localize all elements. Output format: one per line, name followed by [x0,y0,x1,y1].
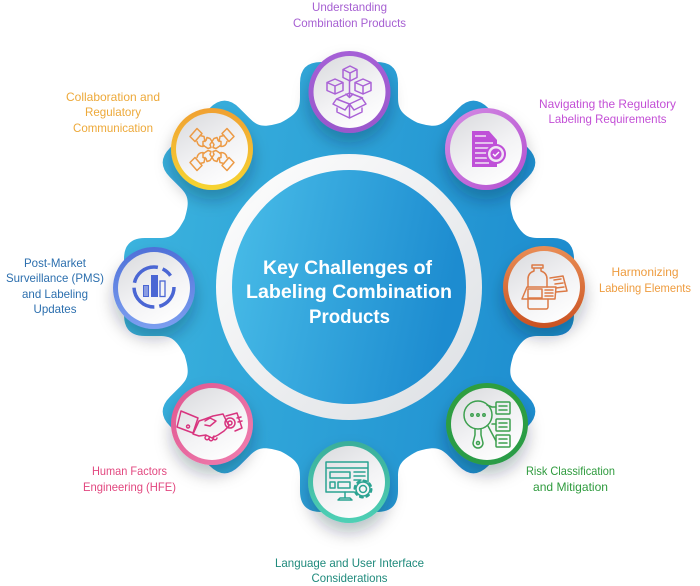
title [246,258,452,328]
label: language [275,556,424,585]
node: harmonizing labeling elements [503,246,585,328]
gear background [124,62,574,512]
label: navigating: Labeling Requirements [548,112,666,126]
icon: handshake [177,411,242,441]
label: collaboration: Regulatory [85,105,141,119]
label: pms: Surveillance (PMS) [6,271,104,285]
icon: magnifier with list [464,401,510,448]
node: language and ui [308,441,390,523]
label: harmonizing: Labeling Elements [599,281,691,295]
icon: chart dial [134,267,174,307]
icon: boxes [327,66,371,118]
label: risk [526,464,615,494]
node: navigating requirements [445,108,527,190]
title: Products [309,307,390,328]
label: human factors: Human Factors [92,464,167,478]
title: Key Challenges of [263,258,433,279]
label: understanding [293,0,406,30]
label: language: Considerations [312,571,388,585]
label: collaboration: Communication [73,121,153,135]
node: risk classification [446,383,528,465]
center hub [216,154,482,420]
label: human factors [83,464,176,494]
node: human factors engineering [171,383,253,465]
label: risk: Risk Classification [526,464,615,478]
label: harmonizing [599,265,691,295]
label: navigating: Navigating the Regulatory [539,97,676,111]
label: understanding: Understanding [312,0,387,14]
icon: document with check [472,131,505,167]
label: risk: and Mitigation [533,480,608,494]
label: navigating [539,97,676,126]
label: human factors: Engineering (HFE) [83,480,176,494]
label: harmonizing: Harmonizing [612,265,678,279]
label: pms: and Labeling [22,287,88,301]
node: collaboration [171,108,253,190]
icon: browser and gear [326,462,372,500]
label: understanding: Combination Products [293,16,406,30]
label: collaboration [66,90,160,135]
label: language: Language and User Interface [275,556,424,570]
label: pms: Post-Market [24,256,87,270]
icon: labeled bottle [522,265,567,309]
node: post-market surveillance [113,247,195,329]
label: pms: Updates [34,302,76,316]
label: pms [6,256,104,316]
title: Labeling Combination [246,282,452,303]
node: understanding combination products [308,51,390,133]
icon: hands with puzzle pieces [190,128,234,170]
label: collaboration: Collaboration and [66,90,160,104]
